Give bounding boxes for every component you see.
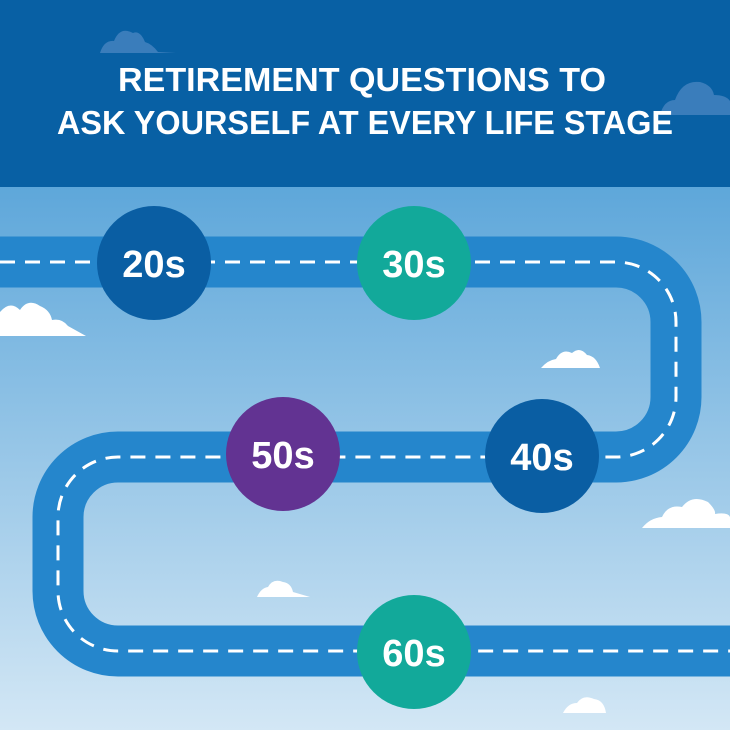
stage: 50s [226, 397, 340, 511]
title: ASK YOURSELF AT EVERY LIFE STAGE [57, 104, 673, 141]
cloud: header right [660, 82, 730, 115]
cloud: header left [100, 31, 176, 53]
clouds [0, 303, 730, 713]
stage: 40s [485, 399, 599, 513]
stage: 40s: 40s [510, 437, 574, 479]
title [57, 61, 673, 141]
stage: 60s: 60s [382, 633, 446, 675]
stage: 20s: 20s [122, 244, 186, 286]
header [0, 0, 730, 187]
stage: 30s [357, 206, 471, 320]
stage: 30s: 30s [382, 244, 446, 286]
title: RETIREMENT QUESTIONS TO [118, 61, 606, 98]
stage: 60s [357, 595, 471, 709]
stage: 20s [97, 206, 211, 320]
road [0, 262, 730, 651]
stage: 50s: 50s [251, 435, 315, 477]
